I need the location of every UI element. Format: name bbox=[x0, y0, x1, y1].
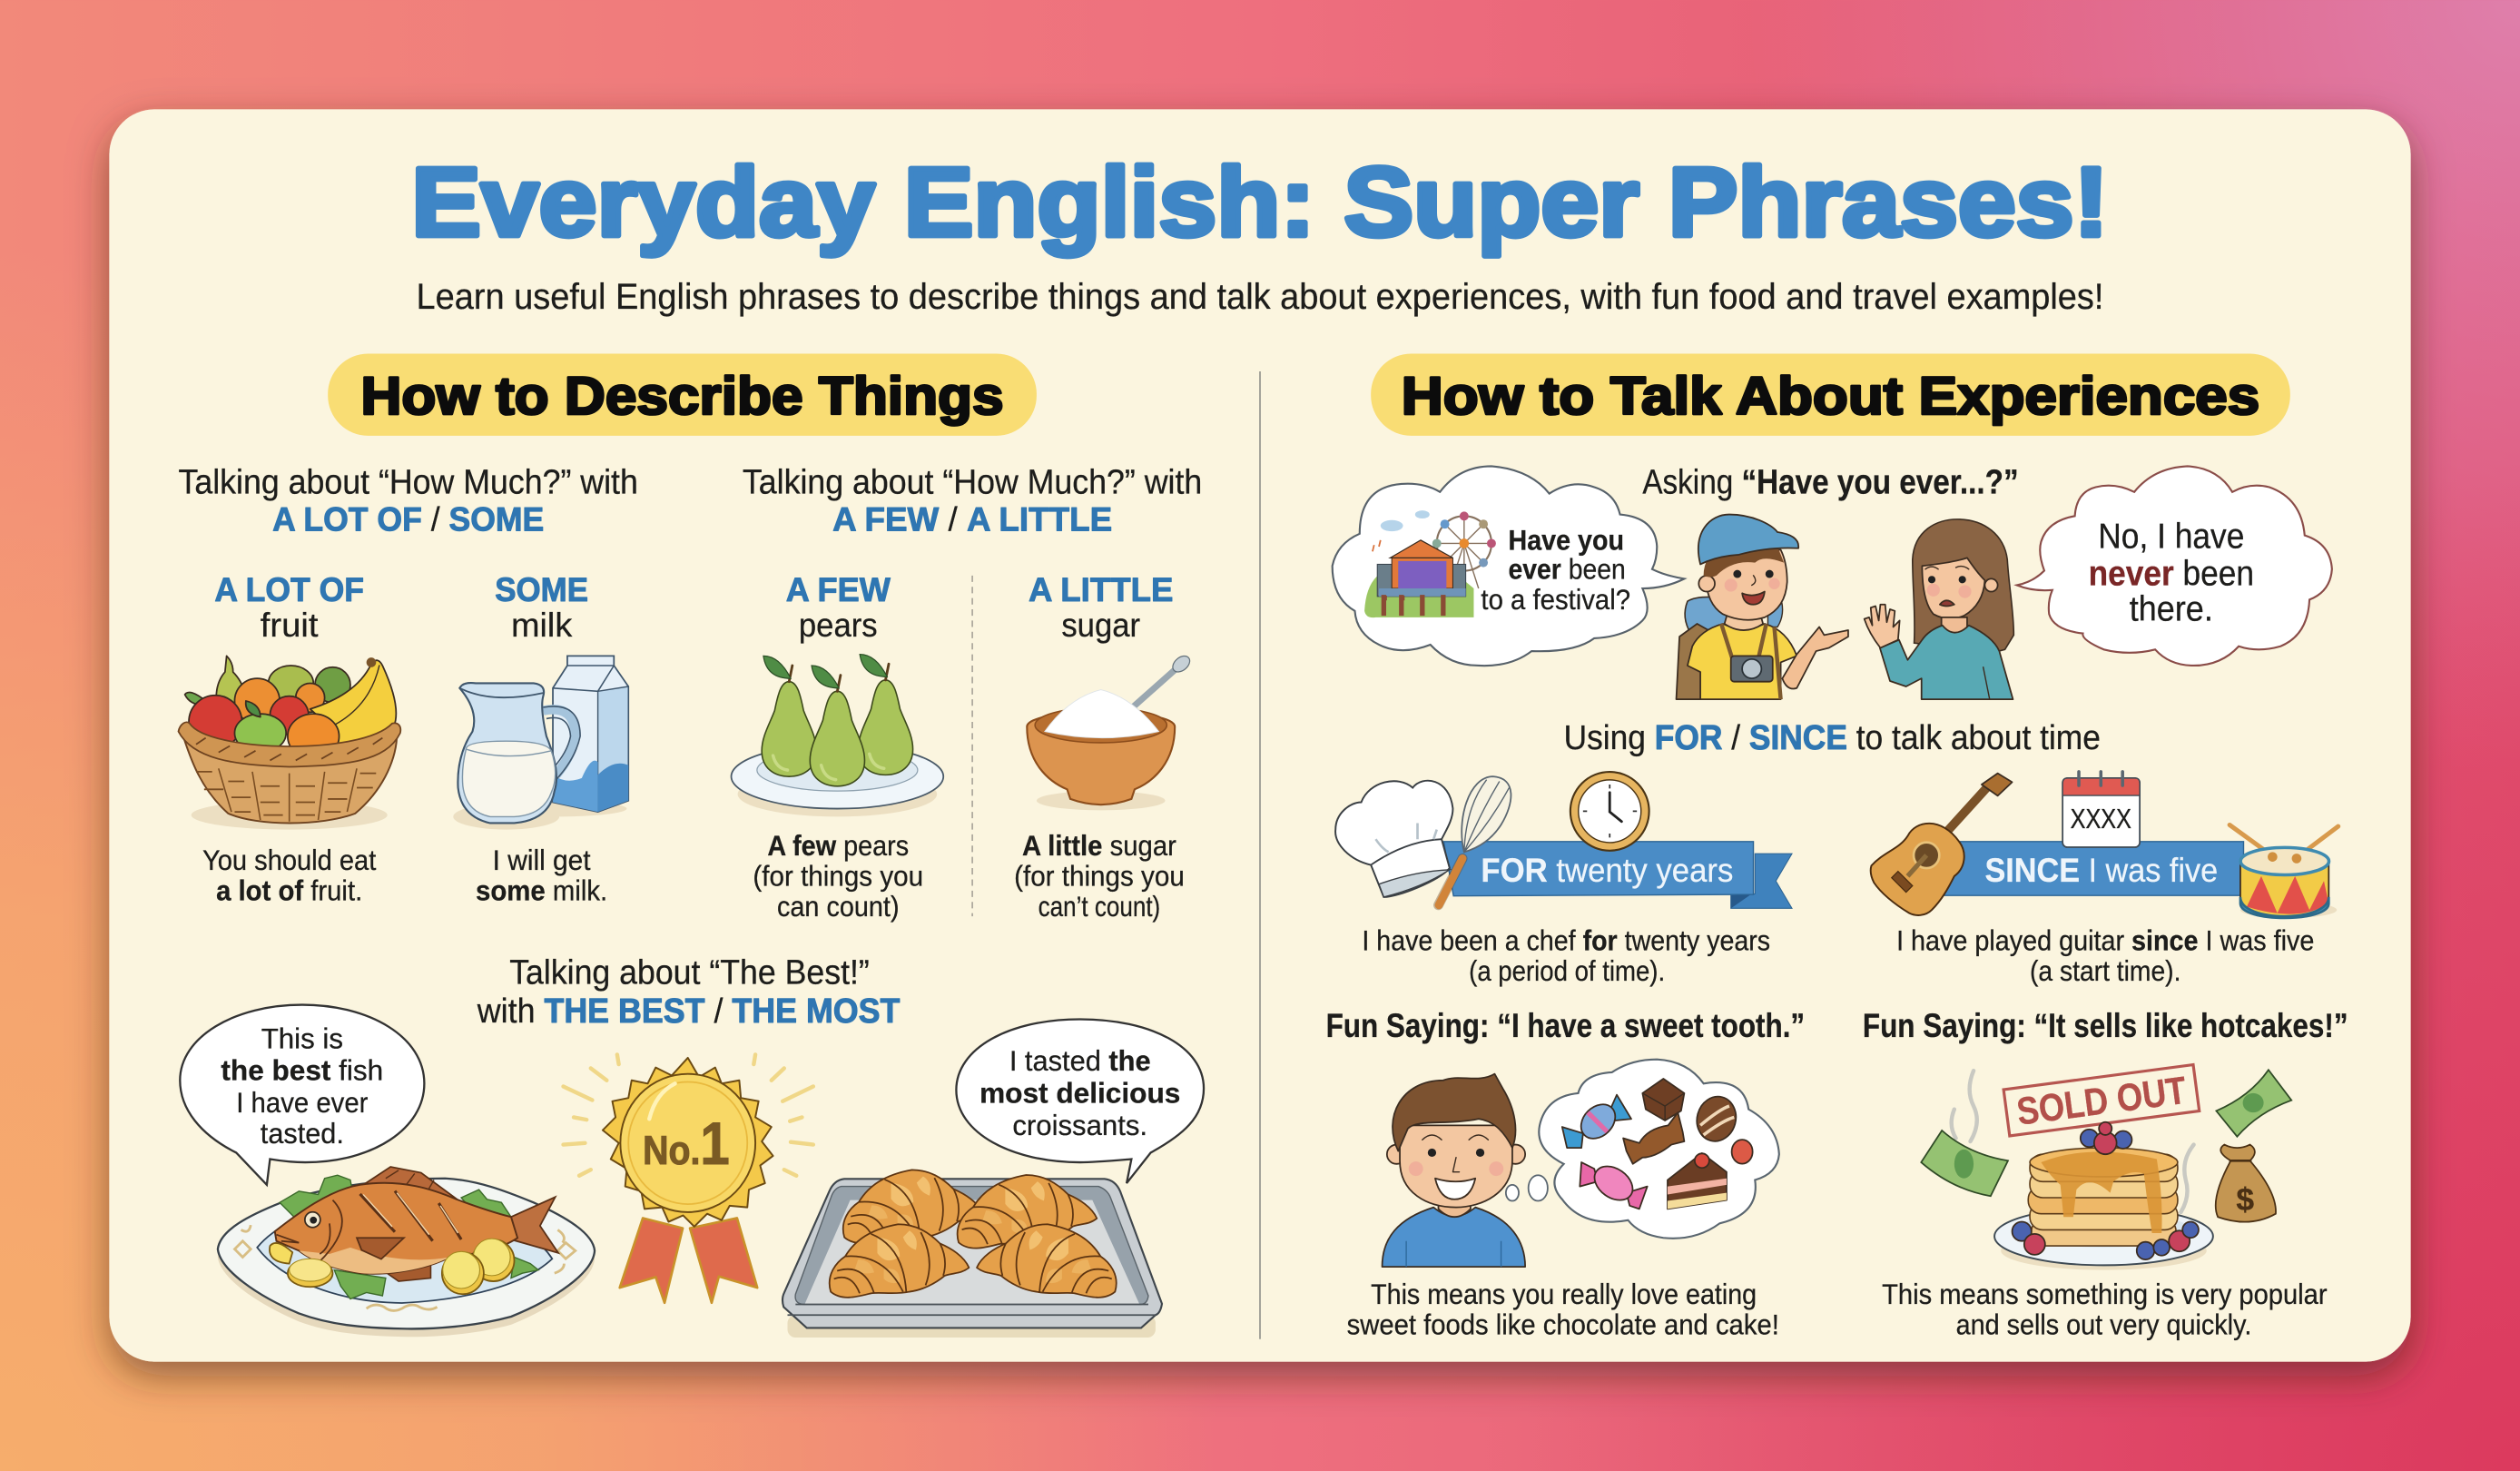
panel: how to talk about experiences bbox=[1326, 354, 2348, 1340]
label: a lot of fruit: A LOT OF bbox=[214, 570, 364, 608]
caption: for: I have been a chef for twenty years bbox=[1362, 923, 1770, 956]
icon: money bag bbox=[2216, 1145, 2276, 1222]
main card panel bbox=[109, 109, 2411, 1362]
subtitle: Learn useful English phrases to describe things and talk about experiences, with fun food and travel examples! bbox=[417, 277, 2103, 317]
subheading: the best / the most: Talking about “The Best!” bbox=[509, 954, 870, 992]
caption: since: I have played guitar since I was five bbox=[1896, 923, 2314, 956]
label: a lot of fruit bbox=[214, 570, 364, 644]
subheading: hotcakes saying: Fun Saying: “It sells like hotcakes!” bbox=[1863, 1006, 2348, 1044]
caption: a few pears bbox=[753, 829, 923, 923]
subheading: have you ever: Asking “Have you ever...?” bbox=[1642, 464, 2019, 502]
title: Everyday English: Super Phrases! bbox=[411, 146, 2109, 256]
label: a little sugar bbox=[1029, 570, 1173, 644]
caption: since bbox=[1896, 923, 2314, 987]
icon: festival stage and ferris wheel bbox=[1364, 510, 1496, 617]
caption: sweet tooth: This means you really love eating bbox=[1371, 1278, 1757, 1310]
banner text: since i was five: SINCE I was five bbox=[1984, 851, 2218, 889]
label: some milk: SOME bbox=[495, 570, 588, 608]
speech bubble: most delicious bbox=[956, 1019, 1204, 1183]
icon: blue candy bbox=[1562, 1095, 1631, 1148]
icon: sold out stamp: SOLD OUT bbox=[2014, 1070, 2189, 1134]
subheading: a few / a little: Talking about “How Much?” with bbox=[743, 464, 1202, 502]
icon: chef hat, whisk, clock and ribbon bbox=[1335, 772, 1792, 908]
caption: a little sugar bbox=[1014, 829, 1185, 923]
heading: how to describe things bbox=[328, 354, 1037, 436]
character: smiling boy bbox=[1383, 1074, 1525, 1267]
icon: croissants on a tray bbox=[783, 1170, 1162, 1338]
panel: how to describe things bbox=[179, 354, 1204, 1338]
caption: a little sugar: (for things you bbox=[1014, 860, 1185, 893]
speech bubble: most delicious: croissants. bbox=[1012, 1109, 1147, 1141]
icon: money bag: $ bbox=[2236, 1181, 2254, 1218]
label: a lot of fruit: fruit bbox=[261, 606, 319, 644]
speech bubble: the best fish: I have ever bbox=[236, 1086, 369, 1119]
caption: a few pears: (for things you bbox=[753, 860, 923, 893]
column divider bbox=[1259, 371, 1261, 1339]
caption: a few pears: A few pears bbox=[767, 829, 909, 862]
icon: guitar, calendar, drum and ribbon: XXXX bbox=[2071, 805, 2131, 834]
subheading: a few / a little bbox=[743, 464, 1202, 538]
icon: chocolate square bbox=[1642, 1079, 1684, 1121]
label: a few pears: A FEW bbox=[786, 570, 891, 608]
speech bubble: the best fish: This is bbox=[261, 1022, 343, 1054]
icon: steam bbox=[1952, 1071, 2194, 1212]
thought cloud: sweets bbox=[1506, 1060, 1779, 1239]
caption: hotcakes bbox=[1882, 1278, 2328, 1340]
subheading: a lot of / some: A LOT OF / SOME bbox=[272, 499, 544, 538]
heading: how to talk about experiences bbox=[1371, 354, 2290, 436]
icon: pears on a plate bbox=[732, 655, 943, 816]
speech cloud: have you ever been to a festival bbox=[1333, 466, 1684, 666]
caption: a lot of fruit: a lot of fruit. bbox=[216, 874, 362, 906]
caption: sweet tooth: sweet foods like chocolate and cake! bbox=[1347, 1308, 1779, 1340]
label: a little sugar: A LITTLE bbox=[1029, 570, 1173, 608]
subheading: sweet tooth saying: Fun Saying: “I have a sweet tooth.” bbox=[1326, 1006, 1805, 1044]
label: a few pears bbox=[786, 570, 891, 644]
caption: hotcakes: and sells out very quickly. bbox=[1956, 1308, 2251, 1340]
caption: for bbox=[1362, 923, 1770, 987]
caption: a lot of fruit: You should eat bbox=[202, 844, 376, 876]
character: traveler boy bbox=[1677, 515, 1848, 699]
icon: fruit basket bbox=[179, 656, 400, 830]
caption: sweet tooth bbox=[1347, 1278, 1779, 1340]
caption: some milk: I will get bbox=[493, 844, 591, 876]
icon: red candy bbox=[1732, 1140, 1753, 1164]
icon: sugar bowl bbox=[1027, 653, 1193, 810]
illustration: hotcakes bbox=[1921, 1065, 2291, 1270]
subheading: a lot of / some: Talking about “How Much?” with bbox=[179, 464, 638, 502]
label: some milk bbox=[495, 570, 588, 644]
subheading: the best / the most bbox=[477, 954, 900, 1031]
speech cloud: never been there: No, I have bbox=[2098, 518, 2244, 557]
speech cloud: have you ever been to a festival: to a festival? bbox=[1481, 583, 1630, 616]
speech cloud: never been there bbox=[2017, 466, 2332, 666]
dashed divider bbox=[971, 576, 973, 916]
banner text: for twenty years: FOR twenty years bbox=[1481, 851, 1733, 889]
subheading: the best / the most: with THE BEST / THE MOST bbox=[477, 992, 900, 1031]
caption: a little sugar: can’t count) bbox=[1039, 890, 1160, 923]
label: a little sugar: sugar bbox=[1061, 606, 1140, 644]
speech cloud: have you ever been to a festival: ever been bbox=[1509, 552, 1626, 585]
icon: milk jug and carton bbox=[453, 656, 628, 830]
icon: pink candy bbox=[1580, 1160, 1648, 1209]
icon: striped chocolate bbox=[1692, 1092, 1741, 1146]
icon: green banknote left bbox=[1921, 1130, 2008, 1196]
icon: green banknote right bbox=[2216, 1070, 2291, 1137]
speech cloud: never been there: never been bbox=[2089, 554, 2254, 593]
icon: layer cake slice bbox=[1668, 1153, 1727, 1209]
label: some milk: milk bbox=[511, 606, 573, 644]
icon: no. 1 medal with ribbon bbox=[564, 1054, 813, 1303]
caption: since: (a start time). bbox=[2030, 954, 2180, 987]
caption: a little sugar: A little sugar bbox=[1022, 829, 1176, 862]
subheading: a few / a little: A FEW / A LITTLE bbox=[832, 499, 1112, 538]
icon: pancake stack on plate bbox=[1994, 1122, 2213, 1270]
speech cloud: never been there: there. bbox=[2130, 589, 2213, 628]
caption: hotcakes: This means something is very popular bbox=[1882, 1278, 2328, 1310]
speech bubble: the best fish: the best fish bbox=[221, 1054, 383, 1087]
heading: how to describe things: How to Describe Things bbox=[360, 367, 1004, 426]
label: a few pears: pears bbox=[799, 606, 878, 644]
character: girl bbox=[1865, 519, 2013, 699]
heading: how to talk about experiences: How to Talk About Experiences bbox=[1402, 367, 2259, 426]
speech bubble: the best fish bbox=[180, 1005, 424, 1185]
caption: some milk bbox=[476, 844, 607, 906]
caption: a lot of fruit bbox=[202, 844, 376, 906]
subheading: for / since: Using FOR / SINCE to talk about time bbox=[1564, 719, 2101, 757]
caption: some milk: some milk. bbox=[476, 874, 607, 906]
icon: guitar, calendar, drum and ribbon bbox=[1871, 772, 2338, 918]
icon: fish on a plate bbox=[218, 1167, 595, 1337]
speech bubble: most delicious: most delicious bbox=[979, 1077, 1180, 1110]
speech cloud: have you ever been to a festival: Have you bbox=[1509, 524, 1624, 557]
icon: no. 1 medal with ribbon: No.1 bbox=[643, 1111, 730, 1177]
speech bubble: most delicious: I tasted the bbox=[1009, 1044, 1151, 1077]
subheading: a lot of / some bbox=[179, 464, 638, 538]
caption: a few pears: can count) bbox=[777, 890, 900, 923]
icon: wrapped toffee bbox=[1623, 1112, 1684, 1164]
speech bubble: the best fish: tasted. bbox=[261, 1117, 344, 1150]
caption: for: (a period of time). bbox=[1469, 954, 1665, 987]
